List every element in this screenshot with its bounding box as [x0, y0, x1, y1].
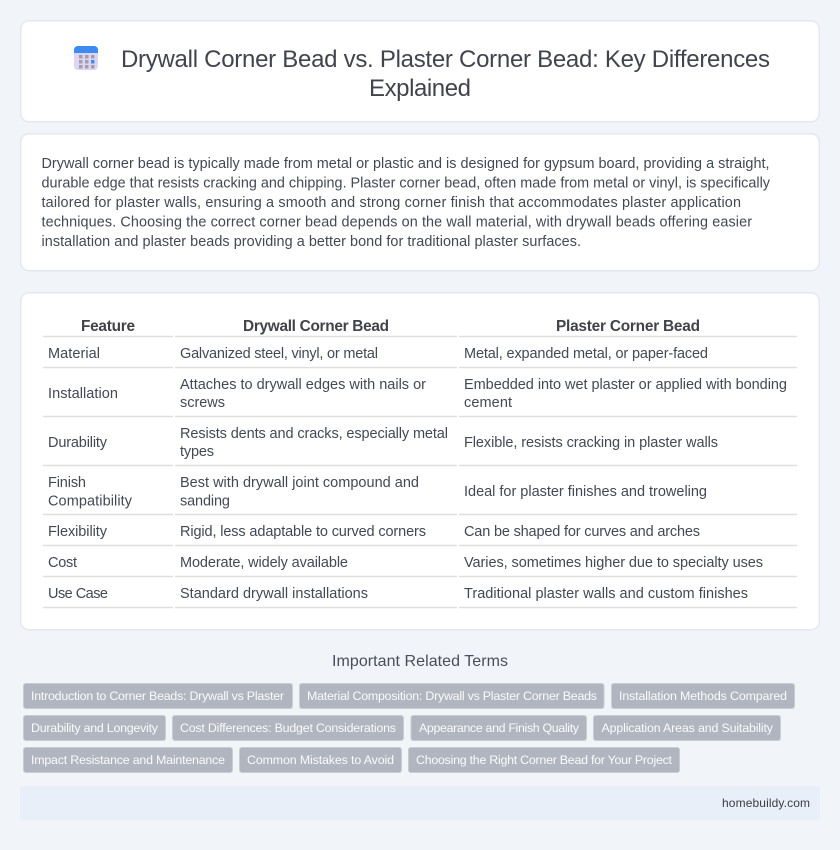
related term tags: Material Composition: Drywall vs Plaster Corner Beads: [307, 689, 597, 703]
row: durability: Flexible, resists cracking in plaster walls: [464, 435, 718, 451]
panel: introduction: [21, 134, 819, 271]
related term tags: Common Mistakes to Avoid: [247, 753, 394, 767]
row: flexibility: Can be shaped for curves and arches: [464, 524, 700, 540]
table header: Drywall Corner Bead: [243, 318, 389, 335]
table header: Feature: [81, 318, 135, 335]
text block: introduction paragraph: [42, 156, 771, 250]
row: flexibility: [48, 524, 700, 540]
row: finish compatibility: Compatibility: [48, 494, 133, 510]
text block: introduction paragraph: tailored for plaster walls, ensuring a smooth and strong corner finish that accommodates plaster application: [42, 195, 741, 211]
row: durability: Resists dents and cracks, especially metal: [180, 426, 448, 442]
related term tags: Cost Differences: Budget Considerations: [180, 721, 396, 735]
row: finish compatibility: Finish: [48, 475, 86, 491]
icon: calendar: [74, 46, 98, 70]
row: use case: Traditional plaster walls and custom finishes: [464, 586, 748, 602]
panel: header: [21, 21, 819, 122]
related term tags: Installation Methods Compared: [619, 689, 787, 703]
title: [121, 46, 770, 102]
row: cost: [48, 555, 763, 571]
row: use case: Standard drywall installations: [180, 586, 368, 602]
row: durability: types: [180, 444, 214, 460]
related term tags: Application Areas and Suitability: [602, 721, 774, 735]
row: installation: Installation: [48, 386, 118, 402]
row: cost: Varies, sometimes higher due to specialty uses: [464, 555, 763, 571]
row: material: Material: [48, 346, 100, 362]
row: installation: screws: [180, 395, 225, 411]
footer: homebuildy.com: [722, 796, 810, 810]
row: durability: [48, 426, 718, 460]
row: finish compatibility: [48, 475, 707, 510]
related term tags: Appearance and Finish Quality: [419, 721, 580, 735]
row: cost: Cost: [48, 555, 77, 571]
row: flexibility: Flexibility: [48, 524, 108, 540]
row: material: Metal, expanded metal, or paper-faced: [464, 346, 708, 362]
table header: [81, 318, 700, 335]
row: finish compatibility: sanding: [180, 494, 230, 510]
heading: related terms: Important Related Terms: [332, 653, 508, 670]
row: cost: Moderate, widely available: [180, 555, 348, 571]
row: installation: Attaches to drywall edges with nails or: [180, 377, 426, 393]
related term tags: [24, 684, 794, 772]
table header: Plaster Corner Bead: [556, 318, 700, 335]
related term tags: Introduction to Corner Beads: Drywall vs Plaster: [31, 689, 284, 703]
text block: introduction paragraph: installation and plaster beads providing a better bond for traditional plaster surfaces.: [42, 234, 581, 250]
row: use case: Use Case: [48, 586, 108, 602]
row: durability: Durability: [48, 435, 108, 451]
title: Drywall Corner Bead vs. Plaster Corner Bead: Key Differences: [121, 46, 770, 73]
row: installation: cement: [464, 395, 512, 411]
row: material: Galvanized steel, vinyl, or metal: [180, 346, 378, 362]
footer: [20, 786, 820, 820]
text block: introduction paragraph: durable edge that resists cracking and chipping. Plaster corner bead, often made from metal or vinyl, is specifically: [42, 176, 771, 192]
row: installation: [48, 377, 787, 411]
panel: comparison table: [21, 293, 819, 630]
related term tags: Choosing the Right Corner Bead for Your Project: [416, 753, 673, 767]
row: use case: [48, 586, 748, 602]
title: Explained: [369, 75, 471, 102]
row: flexibility: Rigid, less adaptable to curved corners: [180, 524, 426, 540]
row: material: [48, 346, 708, 362]
row: finish compatibility: Ideal for plaster finishes and troweling: [464, 484, 707, 500]
related term tags: Durability and Longevity: [31, 721, 159, 735]
row: installation: Embedded into wet plaster or applied with bonding: [464, 377, 787, 393]
row: finish compatibility: Best with drywall joint compound and: [180, 475, 419, 491]
text block: introduction paragraph: Drywall corner bead is typically made from metal or plastic and is designed for gypsum board, providing a straight,: [42, 156, 770, 172]
text block: introduction paragraph: techniques. Choosing the correct corner bead depends on the wall material, with drywall beads offering easier: [42, 214, 752, 230]
related term tags: Impact Resistance and Maintenance: [31, 753, 225, 767]
